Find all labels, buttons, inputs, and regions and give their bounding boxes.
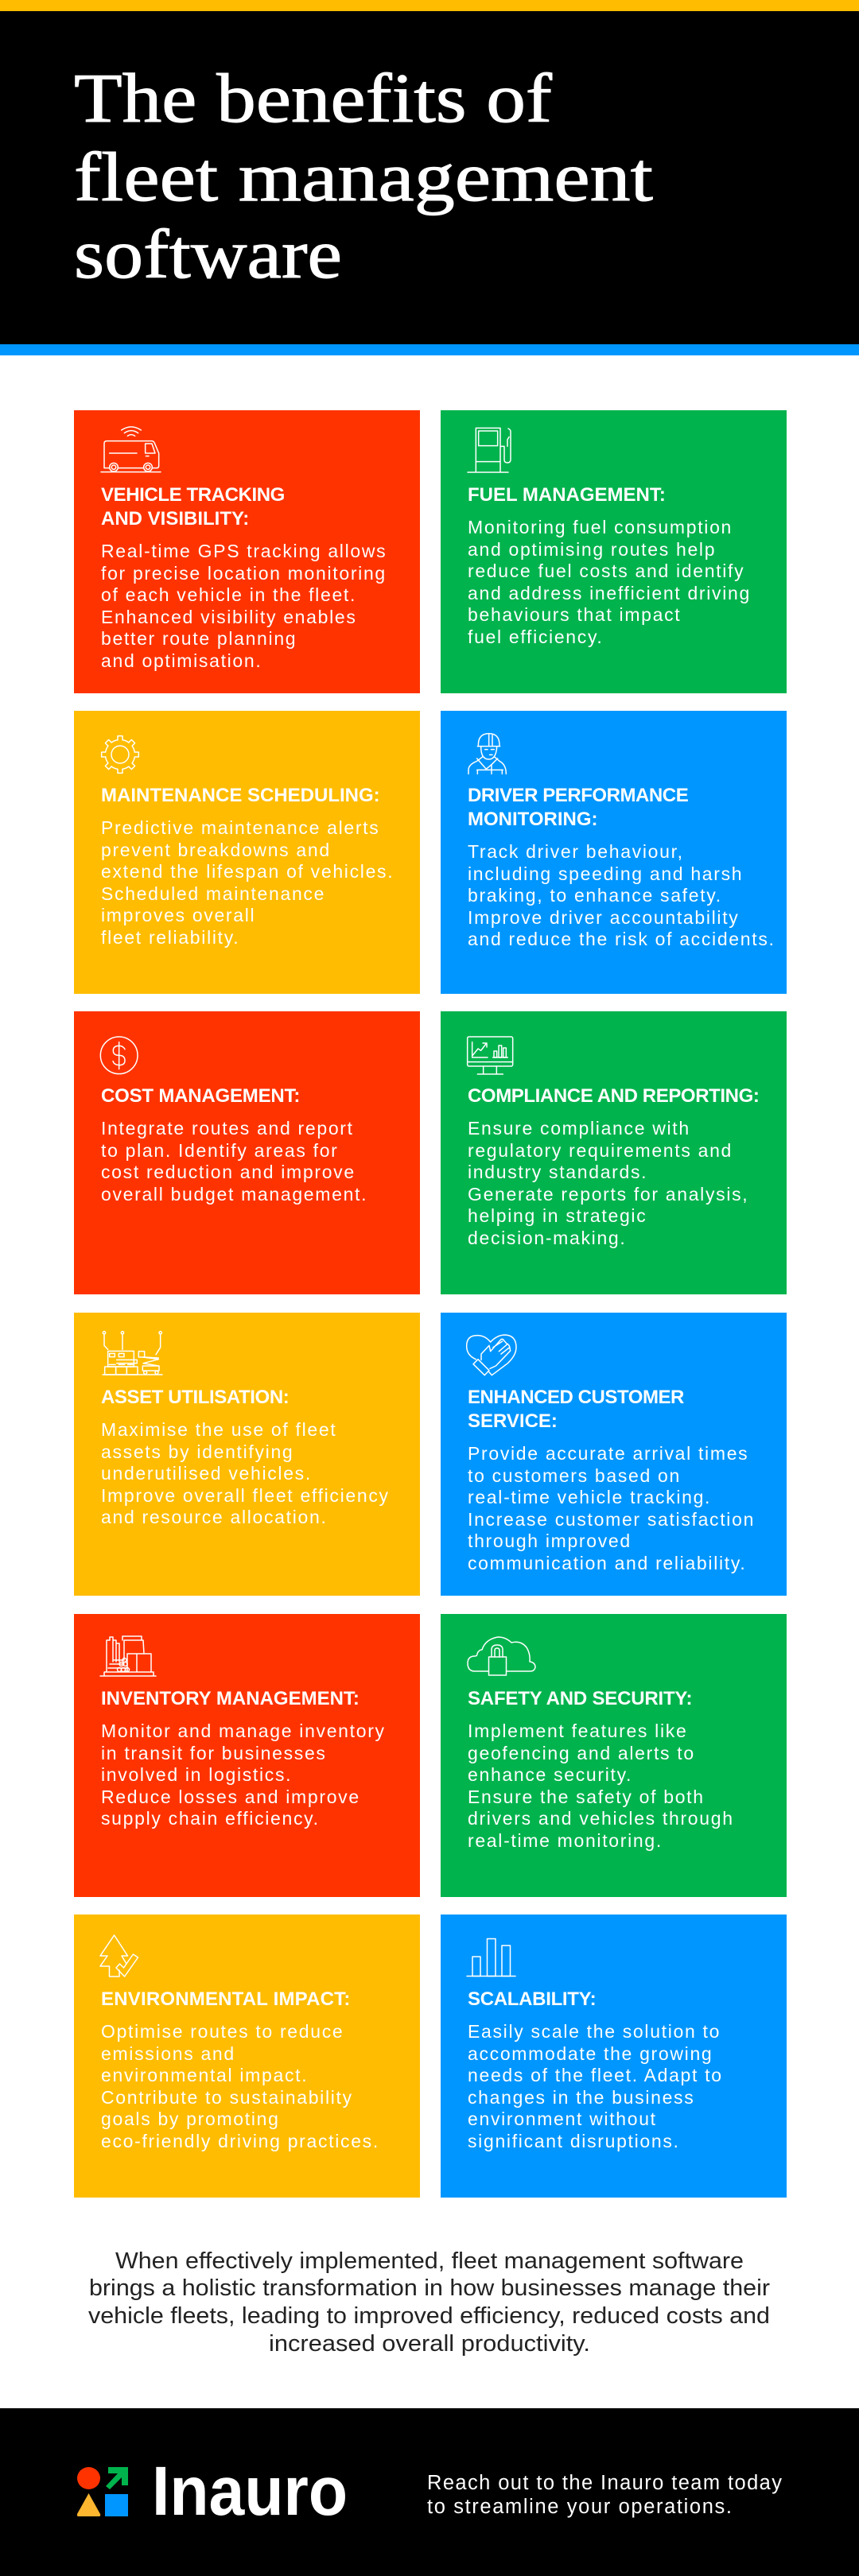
- body text: Predictive maintenance alerts: [101, 817, 379, 838]
- body text: Contribute to sustainability: [101, 2087, 353, 2108]
- closing statement: [88, 2248, 770, 2357]
- body text: decision-making.: [468, 1228, 626, 1248]
- body text: real-time monitoring.: [468, 1830, 663, 1851]
- body text: needs of the fleet. Adapt to: [468, 2065, 723, 2085]
- body text: supply chain efficiency.: [101, 1808, 320, 1829]
- panel: environmental impact: [74, 1915, 420, 2198]
- panel: driver performance monitoring: [441, 711, 787, 994]
- heading: ENHANCED CUSTOMER: [468, 1387, 684, 1408]
- body text: and resource allocation.: [101, 1507, 328, 1527]
- panel: scalability: [441, 1915, 787, 2198]
- body text: Integrate routes and report: [101, 1118, 354, 1139]
- heading: ENVIRONMENTAL IMPACT:: [101, 1988, 351, 2010]
- title: The benefits of: [74, 60, 553, 138]
- body text: Generate reports for analysis,: [468, 1184, 748, 1205]
- body text: in transit for businesses: [101, 1743, 327, 1763]
- call to action: Reach out to the Inauro team today: [427, 2472, 782, 2494]
- body text: assets by identifying: [101, 1441, 293, 1462]
- title: fleet management: [74, 139, 653, 216]
- icon: van with signal: [100, 426, 161, 472]
- body text: prevent breakdowns and: [101, 840, 331, 860]
- heading: SAFETY AND SECURITY:: [468, 1688, 692, 1709]
- body text: changes in the business: [468, 2087, 694, 2108]
- call to action: to streamline your operations.: [427, 2496, 732, 2518]
- panel: enhanced customer service: [441, 1313, 787, 1596]
- body text: to customers based on: [468, 1465, 681, 1486]
- body text: [101, 2021, 379, 2151]
- body text: overall budget management.: [101, 1184, 367, 1205]
- title: [74, 60, 653, 293]
- body text: [101, 817, 394, 948]
- body text: helping in strategic: [468, 1205, 647, 1226]
- heading: FUEL MANAGEMENT:: [468, 484, 666, 506]
- body text: eco-friendly driving practices.: [101, 2131, 379, 2151]
- body text: and address inefficient driving: [468, 583, 751, 603]
- icon: dollar coin: [100, 1036, 138, 1075]
- body text: accommodate the growing: [468, 2043, 713, 2064]
- icon: warehouse stacks: [99, 1635, 157, 1677]
- panel: asset utilisation: [74, 1313, 420, 1596]
- closing statement: increased overall productivity.: [269, 2331, 590, 2357]
- footer panel: [0, 2408, 859, 2576]
- body text: [468, 841, 775, 949]
- body text: enhance security.: [468, 1764, 632, 1785]
- body text: Easily scale the solution to: [468, 2021, 721, 2042]
- heading: [468, 1387, 684, 1432]
- icon: bar chart: [466, 1938, 516, 1977]
- body text: Ensure compliance with: [468, 1118, 690, 1139]
- body text: environmental impact.: [101, 2065, 308, 2085]
- body text: involved in logistics.: [101, 1764, 292, 1785]
- panel: maintenance scheduling: [74, 711, 420, 994]
- closing statement: vehicle fleets, leading to improved efficiency, reduced costs and: [88, 2303, 770, 2329]
- body text: Ensure the safety of both: [468, 1787, 705, 1807]
- body text: [468, 1443, 755, 1573]
- body text: Improve overall fleet efficiency: [101, 1485, 390, 1506]
- body text: Implement features like: [468, 1721, 687, 1741]
- body text: [468, 1721, 734, 1851]
- body text: reduce fuel costs and identify: [468, 561, 744, 581]
- icon: heart and hand: [466, 1334, 517, 1375]
- body text: for precise location monitoring: [101, 563, 387, 584]
- heading: [101, 484, 285, 530]
- body text: Enhanced visibility enables: [101, 607, 357, 627]
- body text: [101, 1721, 386, 1829]
- body text: underutilised vehicles.: [101, 1463, 312, 1484]
- body text: communication and reliability.: [468, 1553, 746, 1573]
- panel: fuel management: [441, 410, 787, 693]
- body text: and optimising routes help: [468, 539, 716, 560]
- body text: [101, 1118, 367, 1205]
- logo mark: [77, 2467, 128, 2516]
- body text: Monitor and manage inventory: [101, 1721, 386, 1741]
- body text: of each vehicle in the fleet.: [101, 584, 356, 605]
- body text: [101, 1419, 390, 1527]
- header accent band: [0, 344, 859, 355]
- body text: cost reduction and improve: [101, 1162, 356, 1182]
- body text: Reduce losses and improve: [101, 1787, 360, 1807]
- body text: significant disruptions.: [468, 2131, 680, 2151]
- body text: through improved: [468, 1530, 632, 1551]
- heading: INVENTORY MANAGEMENT:: [101, 1688, 360, 1709]
- body text: and optimisation.: [101, 650, 262, 671]
- body text: fuel efficiency.: [468, 627, 603, 647]
- body text: drivers and vehicles through: [468, 1808, 734, 1829]
- body text: [101, 541, 387, 671]
- panel: vehicle tracking: [74, 410, 420, 693]
- body text: braking, to enhance safety.: [468, 885, 722, 906]
- body text: behaviours that impact: [468, 604, 681, 625]
- body text: real-time vehicle tracking.: [468, 1487, 711, 1507]
- body text: and reduce the risk of accidents.: [468, 929, 775, 949]
- icon: driver with hard hat: [468, 733, 507, 774]
- title: software: [74, 216, 342, 293]
- body text: Increase customer satisfaction: [468, 1509, 755, 1530]
- panel: inventory management: [74, 1614, 420, 1897]
- body text: Maximise the use of fleet: [101, 1419, 336, 1440]
- body text: Real-time GPS tracking allows: [101, 541, 387, 561]
- header panel: [0, 11, 859, 344]
- panel: compliance and reporting: [441, 1011, 787, 1294]
- icon: tree with checkmark: [99, 1934, 138, 1977]
- body text: improves overall: [101, 905, 255, 925]
- body text: fleet reliability.: [101, 927, 239, 948]
- heading: VEHICLE TRACKING: [101, 484, 285, 506]
- body text: regulatory requirements and: [468, 1140, 733, 1161]
- closing statement: When effectively implemented, fleet management software: [115, 2248, 744, 2274]
- body text: Improve driver accountability: [468, 907, 739, 928]
- body text: to plan. Identify areas for: [101, 1140, 339, 1161]
- body text: [468, 1118, 748, 1248]
- heading: MONITORING:: [468, 809, 598, 830]
- body text: [468, 517, 751, 647]
- heading: COMPLIANCE AND REPORTING:: [468, 1085, 759, 1107]
- body text: better route planning: [101, 628, 297, 649]
- heading: [468, 785, 688, 830]
- body text: emissions and: [101, 2043, 235, 2064]
- body text: geofencing and alerts to: [468, 1743, 695, 1763]
- body text: goals by promoting: [101, 2109, 280, 2129]
- heading: AND VISIBILITY:: [101, 508, 249, 530]
- body text: extend the lifespan of vehicles.: [101, 861, 394, 882]
- heading: SERVICE:: [468, 1410, 558, 1432]
- body text: Monitoring fuel consumption: [468, 517, 733, 537]
- call to action: [427, 2472, 782, 2518]
- panel: safety and security: [441, 1614, 787, 1897]
- icon: gear: [100, 735, 140, 774]
- closing statement: brings a holistic transformation in how businesses manage their: [89, 2275, 770, 2301]
- body text: Track driver behaviour,: [468, 841, 684, 862]
- panel: cost management: [74, 1011, 420, 1294]
- body text: Scheduled maintenance: [101, 883, 325, 904]
- icon: fuel pump: [467, 428, 511, 473]
- heading: COST MANAGEMENT:: [101, 1085, 300, 1107]
- icon: cloud with padlock: [467, 1636, 536, 1676]
- icon: monitor with charts: [466, 1036, 514, 1075]
- icon: connected assets: [102, 1331, 163, 1375]
- body text: Provide accurate arrival times: [468, 1443, 748, 1464]
- body text: environment without: [468, 2109, 657, 2129]
- body text: [468, 2021, 723, 2151]
- heading: SCALABILITY:: [468, 1988, 596, 2010]
- top accent band: [0, 0, 859, 11]
- body text: industry standards.: [468, 1162, 647, 1182]
- body text: including speeding and harsh: [468, 863, 743, 884]
- heading: MAINTENANCE SCHEDULING:: [101, 785, 380, 806]
- body text: Optimise routes to reduce: [101, 2021, 344, 2042]
- heading: ASSET UTILISATION:: [101, 1387, 289, 1408]
- heading: DRIVER PERFORMANCE: [468, 785, 688, 806]
